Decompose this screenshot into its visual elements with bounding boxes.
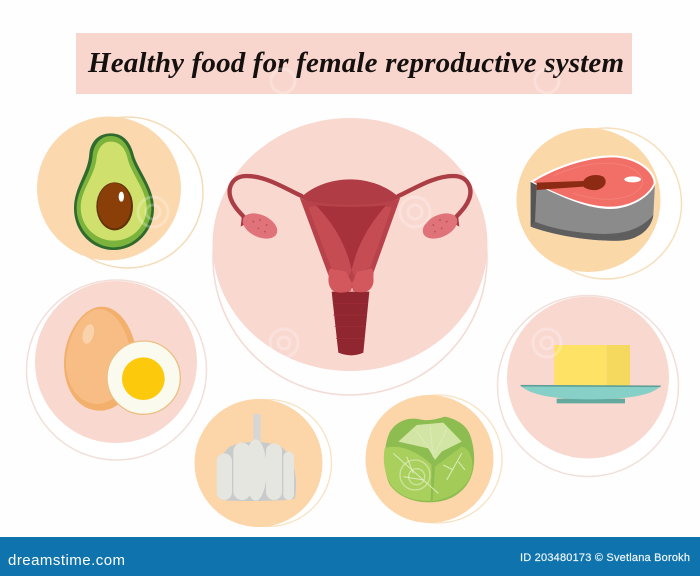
panel: salmon	[516, 128, 682, 279]
panel: avocado	[37, 116, 203, 268]
footer credit: ID 203480173 © Svetlana Borokh	[520, 552, 690, 564]
title banner	[76, 33, 632, 94]
icon: garlic	[217, 414, 296, 501]
watermark spirals	[138, 69, 561, 357]
illustration: female reproductive organs	[230, 176, 470, 355]
icon: cabbage	[384, 417, 474, 502]
panel: uterus centre	[212, 118, 488, 395]
panel: garlic	[194, 399, 332, 527]
panel: egg	[26, 280, 206, 460]
icon: egg	[64, 307, 180, 414]
panel: butter	[498, 296, 678, 476]
panel: cabbage	[366, 395, 502, 523]
icon: butter on plate	[521, 345, 661, 403]
footer bar	[0, 537, 700, 576]
icon: salmon steak	[530, 155, 656, 241]
icon: avocado	[74, 133, 154, 250]
footer logo text: dreamstime.com	[8, 552, 125, 569]
title banner: Healthy food for female reproductive system	[87, 47, 624, 79]
